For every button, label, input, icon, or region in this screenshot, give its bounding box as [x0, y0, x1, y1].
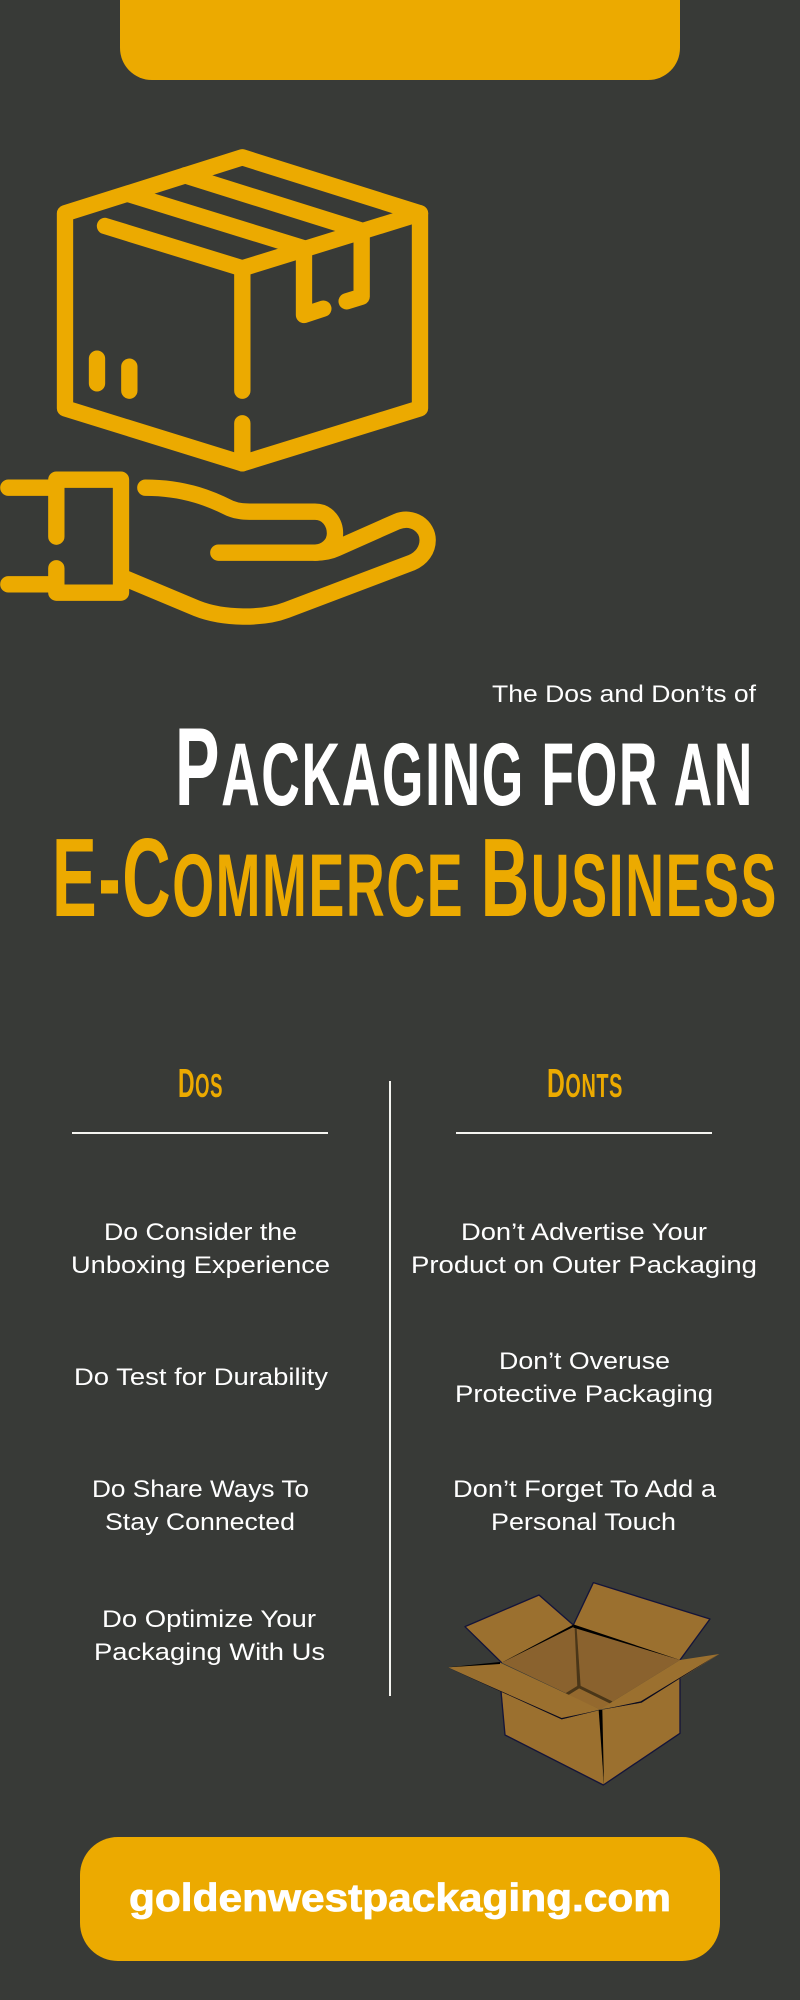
- do item 3: Stay Connected: [105, 1509, 295, 1536]
- dont item 2: Don’t Overuse: [499, 1348, 670, 1375]
- donts list: [411, 1219, 757, 1536]
- subtitle: The Dos and Don’ts of: [492, 681, 756, 708]
- do item 4: Do Optimize Your: [102, 1606, 316, 1633]
- do item 1: Do Consider the: [104, 1219, 297, 1246]
- dont item 3: Personal Touch: [491, 1509, 676, 1536]
- do item 4: Packaging With Us: [94, 1639, 325, 1666]
- dont item 3: Don’t Forget To Add a: [453, 1476, 717, 1503]
- do item 2: Do Test for Durability: [74, 1364, 328, 1391]
- dont item 2: Protective Packaging: [455, 1381, 713, 1408]
- dont item 1: Product on Outer Packaging: [411, 1252, 757, 1279]
- do item 1: Unboxing Experience: [71, 1252, 330, 1279]
- icon part: open hand and cuff: [8, 480, 428, 617]
- dont item 1: [411, 1219, 757, 1279]
- do item 3: Do Share Ways To: [92, 1476, 309, 1503]
- heading: Donts: DONTS: [547, 1060, 623, 1106]
- dont item 3: [453, 1476, 717, 1536]
- dont item 2: [455, 1348, 713, 1408]
- website button: goldenwestpackaging.com: [129, 1877, 671, 1920]
- icon: open cardboard box: [447, 1583, 719, 1785]
- website button: [80, 1837, 720, 1961]
- do item 3: [92, 1476, 309, 1536]
- heading: Dos: DOS: [178, 1060, 223, 1106]
- dont item 1: Don’t Advertise Your: [461, 1219, 707, 1246]
- top banner tab: [120, 0, 680, 80]
- dos list: [71, 1219, 330, 1666]
- do item 4: [94, 1606, 325, 1666]
- do item 1: [71, 1219, 330, 1279]
- icon: package box on open hand: [8, 157, 428, 617]
- icon part: box outline and tape: [65, 157, 420, 463]
